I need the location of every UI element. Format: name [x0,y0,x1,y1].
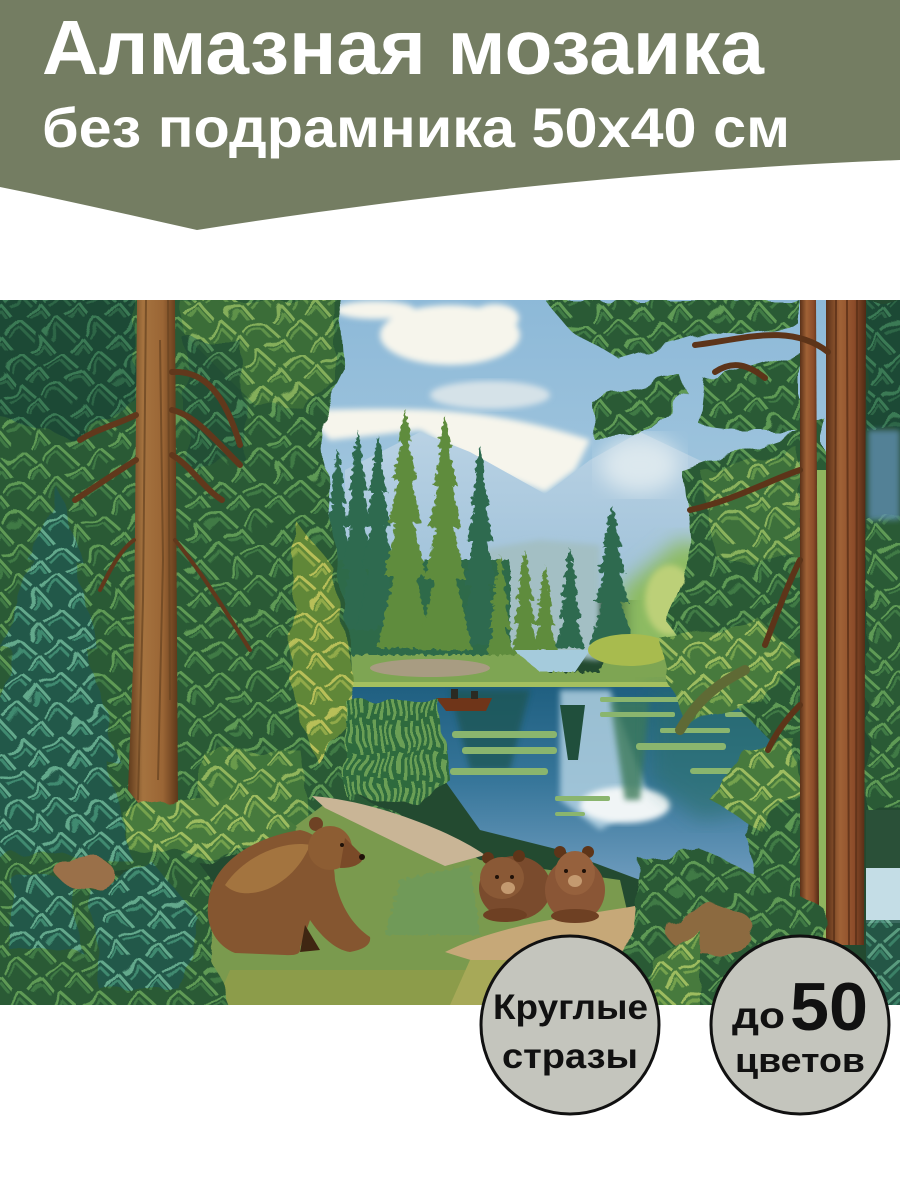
undergrowth bottom left [0,790,300,1010]
badge: up to 50 colours: до [732,995,785,1036]
right branch clumps [545,300,800,440]
water reflections [560,690,650,830]
header banner [0,0,900,230]
subtitle: без подрамника 50х40 см [42,96,790,159]
sky with clouds [320,300,826,528]
badge: round rhinestones [481,936,659,1114]
far water inlet [515,650,590,672]
title: Алмазная мозаика [42,5,765,91]
badge: round rhinestones: стразы [502,1037,638,1076]
lily pads [345,682,775,816]
conifers behind lake [323,408,634,660]
bear: sitting adult [208,817,370,955]
right trunks [680,300,866,945]
badge: up to 50 colours: цветов [735,1042,865,1080]
right forest mass [660,300,900,900]
left large trunk [75,300,250,818]
distant mountains [345,432,720,600]
left blue-green fir [0,490,132,860]
distant hazy tree line [488,528,692,664]
right mid gaps [817,430,900,1010]
lake [345,682,800,880]
bear cubs [479,846,605,923]
badge: up to 50 colours: 50 [790,969,868,1045]
rowing boat [436,689,492,711]
far shore with flowers [351,634,668,682]
undergrowth bottom right [625,850,830,1010]
badge: up to 50 colours [711,936,889,1114]
forest floor [210,796,636,1005]
badge: round rhinestones: Круглые [493,988,648,1027]
illustration: forest lake with bears [0,290,900,1010]
left forest mass [0,290,445,870]
